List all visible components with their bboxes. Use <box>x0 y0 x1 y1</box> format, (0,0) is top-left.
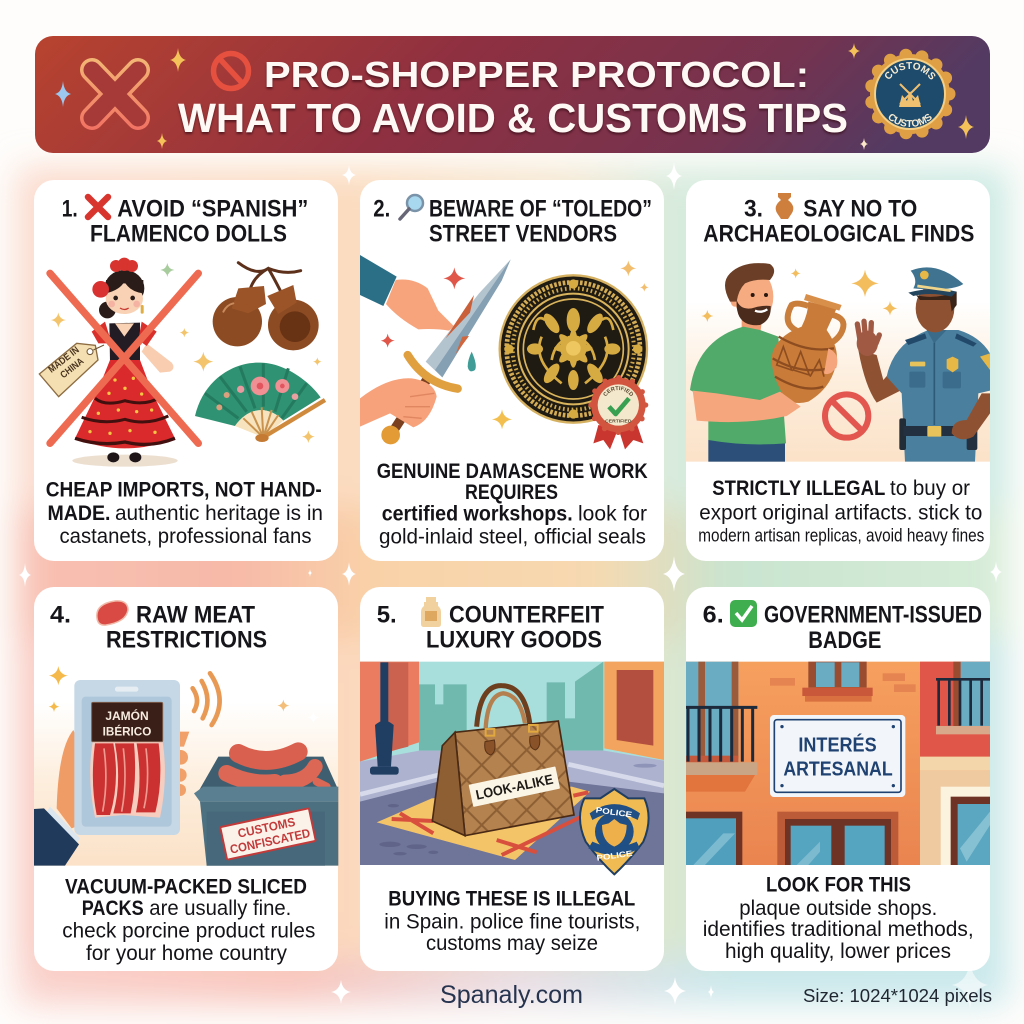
body text 4: check porcine product rules <box>62 920 315 943</box>
heading 3: SAY NO TO <box>803 196 917 222</box>
banner sparkles <box>55 43 974 150</box>
body text 2: gold-inlaid steel, official seals <box>379 525 646 548</box>
heading 4: 4. <box>50 601 71 628</box>
icon: customs badge: CUSTOMS <box>888 114 932 127</box>
icon: prohibited sign <box>214 54 248 88</box>
heading 5: LUXURY GOODS <box>426 627 602 654</box>
heading 3: 3. <box>744 196 763 222</box>
body text 3 <box>698 477 984 546</box>
handbag <box>431 683 575 837</box>
icon: customs badge <box>865 48 956 140</box>
body text 5 <box>384 888 640 955</box>
heading 2: BEWARE OF “TOLEDO” <box>429 196 652 222</box>
jamon iberico pack <box>74 680 180 835</box>
Interes Artesanal plaque <box>770 715 905 797</box>
background sparkles <box>19 162 1002 1009</box>
blanket <box>377 787 590 860</box>
icon: customs badge: CUSTOMS <box>885 62 936 80</box>
body text 4 <box>62 875 315 965</box>
certified seal: CERTIFIED <box>605 419 632 425</box>
heading 4 <box>50 601 267 654</box>
heading 6: GOVERNMENT-ISSUED <box>764 601 982 628</box>
illustration: vacuum pack and confiscation bin <box>34 657 338 866</box>
lower windows <box>686 812 898 865</box>
panel 6: government-issued badge <box>686 587 990 971</box>
hand fan <box>195 363 325 442</box>
heading 6: BADGE <box>808 627 881 654</box>
left window and balcony <box>686 662 757 792</box>
heading 1: FLAMENCO DOLLS <box>90 220 287 248</box>
heading 6 <box>703 600 982 654</box>
body text 6: LOOK FOR THIS <box>766 874 911 897</box>
gripping hand <box>360 378 437 427</box>
illustration: doll, castanets and fan <box>39 258 325 467</box>
panel 3: archaeological finds <box>686 180 990 561</box>
heading 2 <box>373 195 652 248</box>
panel 5: counterfeit luxury goods <box>360 587 678 971</box>
sparkles <box>51 263 322 443</box>
made in China tag <box>39 343 104 397</box>
pointing hand <box>360 255 454 331</box>
body text 6: plaque outside shops. <box>739 897 937 920</box>
illustration: sword and damascene plate <box>360 255 648 450</box>
jamon iberico pack: IBÉRICO <box>103 723 151 738</box>
body text 1 <box>46 478 323 548</box>
body text 1: castanets, professional fans <box>60 525 312 548</box>
heading 5: 5. <box>377 601 397 628</box>
heading 1: 1. <box>62 196 78 222</box>
heading 4: RAW MEAT <box>136 601 255 628</box>
amphora <box>772 294 843 403</box>
street scene <box>360 662 664 865</box>
sword <box>381 259 511 444</box>
illustration: fake handbag on street blanket <box>360 662 678 874</box>
body text 3: STRICTLY ILLEGAL <box>712 477 885 500</box>
tourist arm <box>693 391 801 422</box>
body text 1: MADE. <box>48 502 110 525</box>
heading 2: STREET VENDORS <box>429 220 617 248</box>
bin with sausages: CONFISCATED <box>229 826 312 857</box>
body text 6 <box>703 874 974 963</box>
heading 3 <box>703 193 974 248</box>
heading 4: RESTRICTIONS <box>106 627 267 654</box>
sparkles <box>701 268 897 322</box>
body text 4: are usually fine. <box>149 897 291 920</box>
body text 3: to buy or <box>890 477 970 500</box>
heading 6: 6. <box>703 601 724 628</box>
body text 3: export original artifacts. stick to <box>699 501 982 524</box>
right window and balcony <box>936 662 990 734</box>
prohibited sign <box>825 394 868 438</box>
icon: outlined X <box>92 70 138 118</box>
heading 5: COUNTERFEIT <box>449 601 604 628</box>
heading 3: ARCHAEOLOGICAL FINDS <box>703 220 974 248</box>
damascene plate <box>500 275 647 423</box>
sparkles <box>49 666 319 724</box>
police badge: POLICE <box>595 805 633 820</box>
body text 1: CHEAP IMPORTS, NOT HAND- <box>46 478 322 502</box>
title text <box>178 54 848 141</box>
flamenco doll <box>75 258 175 462</box>
footer: image size: Size: 1024*1024 pixels <box>803 986 992 1006</box>
bin with sausages <box>194 752 338 866</box>
body text 6: high quality, lower prices <box>725 940 951 963</box>
building facade <box>686 662 990 865</box>
police badge <box>580 789 649 874</box>
crossed-out mark <box>50 273 198 443</box>
body text 2: look for <box>578 503 647 526</box>
body text 2: REQUIRES <box>465 481 558 504</box>
police officer <box>857 267 990 462</box>
body text 4: for your home country <box>86 942 287 965</box>
body text 1: authentic heritage is in <box>115 502 323 525</box>
castanets <box>213 263 319 350</box>
Interes Artesanal plaque: INTERÉS <box>798 734 877 757</box>
footer: site name: Spanaly.com <box>440 981 583 1009</box>
Interes Artesanal plaque: ARTESANAL <box>783 758 893 781</box>
body text 5: in Spain. police fine tourists, <box>384 910 640 933</box>
heading 5 <box>377 597 604 654</box>
body text 5: BUYING THESE IS ILLEGAL <box>388 888 635 911</box>
title banner <box>35 36 990 153</box>
sparkles <box>381 260 649 429</box>
body text 2: certified workshops. <box>382 503 573 526</box>
body text 4: VACUUM-PACKED SLICED <box>65 875 307 898</box>
bin with sausages: CUSTOMS <box>237 815 297 841</box>
hand and sleeve <box>34 730 189 866</box>
panel 2: Toledo street vendors <box>360 180 664 561</box>
panel 4: raw meat restrictions <box>34 587 338 971</box>
body text 6: identifies traditional methods, <box>703 918 974 941</box>
title text: WHAT TO AVOID & CUSTOMS TIPS <box>178 95 848 141</box>
body text 2 <box>377 460 648 548</box>
body text 5: customs may seize <box>426 932 598 955</box>
jamon iberico pack: JAMÓN <box>105 708 149 723</box>
tourist with beard <box>690 263 786 462</box>
top window <box>802 662 873 702</box>
body text 2: GENUINE DAMASCENE WORK <box>377 460 648 483</box>
made in China tag: CHINA <box>58 356 86 381</box>
police badge: POLICE <box>596 849 634 863</box>
scent waves <box>193 673 220 725</box>
heading 1: AVOID “SPANISH” <box>117 196 308 222</box>
title text: PRO-SHOPPER PROTOCOL: <box>264 54 809 95</box>
body text 4: PACKS <box>82 897 144 920</box>
handbag: LOOK-ALIKE <box>474 772 554 803</box>
certified seal: CERTIFIED <box>604 386 634 396</box>
heading 1 <box>62 196 308 248</box>
panel 1: flamenco dolls <box>34 180 338 561</box>
illustration: artisan plaque on building facade <box>686 662 990 865</box>
heading 2: 2. <box>373 196 390 222</box>
made in China tag: MADE IN <box>46 345 82 375</box>
illustration: tourist, amphora and officer <box>686 257 990 462</box>
certified seal <box>588 375 648 450</box>
